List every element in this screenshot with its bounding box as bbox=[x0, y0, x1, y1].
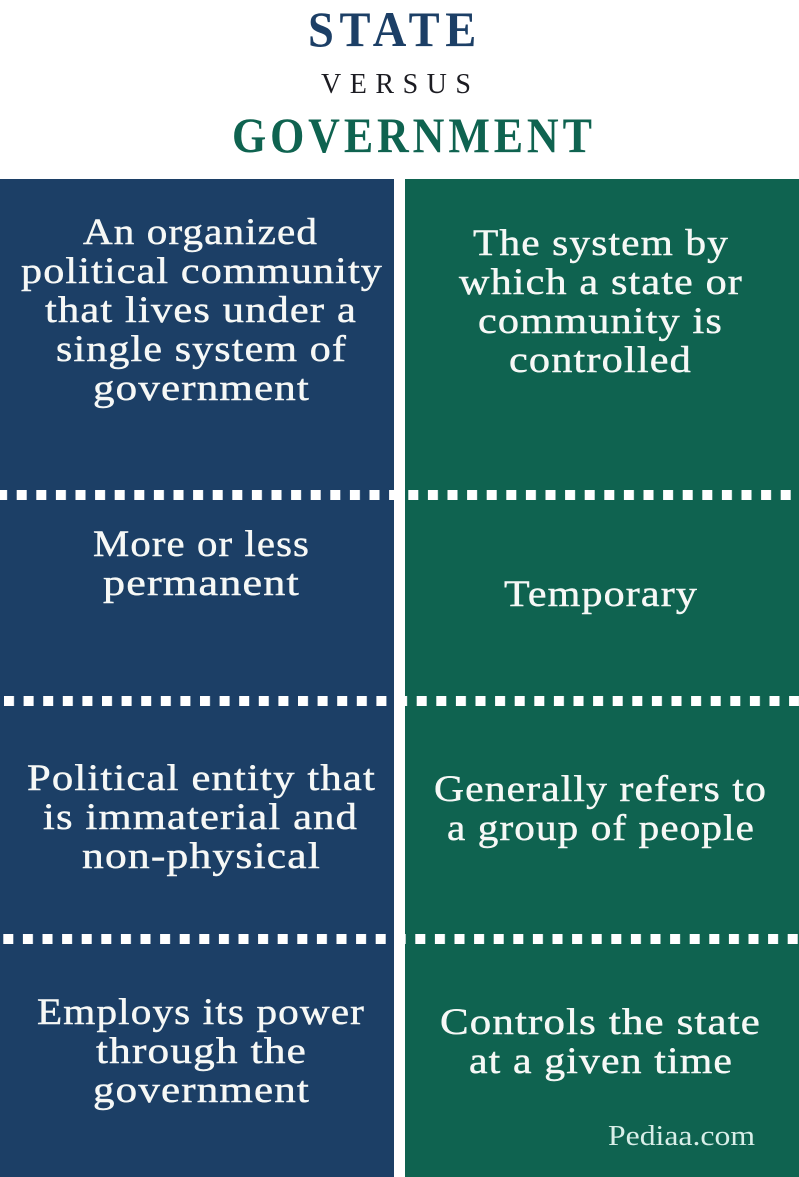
text: government definition: The system by bbox=[473, 223, 729, 264]
text: state definition: government bbox=[93, 368, 310, 409]
text: government power bbox=[440, 1002, 761, 1082]
text: government definition: which a state or bbox=[459, 262, 743, 303]
subtitle: versus: VERSUS bbox=[321, 69, 471, 100]
text: state definition: An organized bbox=[83, 212, 318, 253]
text: state power: through the bbox=[96, 1031, 307, 1072]
panel: government column bbox=[405, 179, 799, 1177]
text: state permanence bbox=[93, 524, 310, 604]
text: state definition: that lives under a bbox=[45, 290, 357, 331]
text: government power: Controls the state bbox=[440, 1002, 761, 1043]
text: government power: at a given time bbox=[469, 1041, 733, 1082]
text: state power: Employs its power bbox=[37, 992, 365, 1033]
title: state: STATE bbox=[308, 3, 476, 57]
text: government definition: community is bbox=[478, 301, 723, 342]
text: state nature bbox=[27, 758, 376, 877]
text: state nature: Political entity that bbox=[27, 758, 376, 799]
text: government nature: Generally refers to bbox=[434, 769, 767, 810]
text: government permanence: Temporary bbox=[504, 574, 698, 615]
title block bbox=[232, 3, 592, 164]
text: government definition bbox=[459, 223, 743, 381]
text: state definition bbox=[21, 212, 383, 409]
watermark: Pediaa.com: Pediaa.com bbox=[608, 1121, 755, 1152]
text: state permanence: More or less bbox=[93, 524, 310, 565]
panel: state column bbox=[0, 179, 394, 1177]
title: government: GOVERNMENT bbox=[232, 108, 592, 164]
text: state permanence: permanent bbox=[103, 563, 300, 604]
text: state definition: single system of bbox=[56, 329, 347, 370]
text: state definition: political community bbox=[21, 251, 383, 292]
text: state nature: non-physical bbox=[82, 836, 321, 877]
text: state power: government bbox=[93, 1070, 310, 1111]
text: government nature: a group of people bbox=[447, 808, 755, 849]
text: government nature bbox=[434, 769, 767, 849]
text: state power bbox=[37, 992, 365, 1111]
text: state nature: is immaterial and bbox=[43, 797, 358, 838]
text: government definition: controlled bbox=[509, 340, 692, 381]
